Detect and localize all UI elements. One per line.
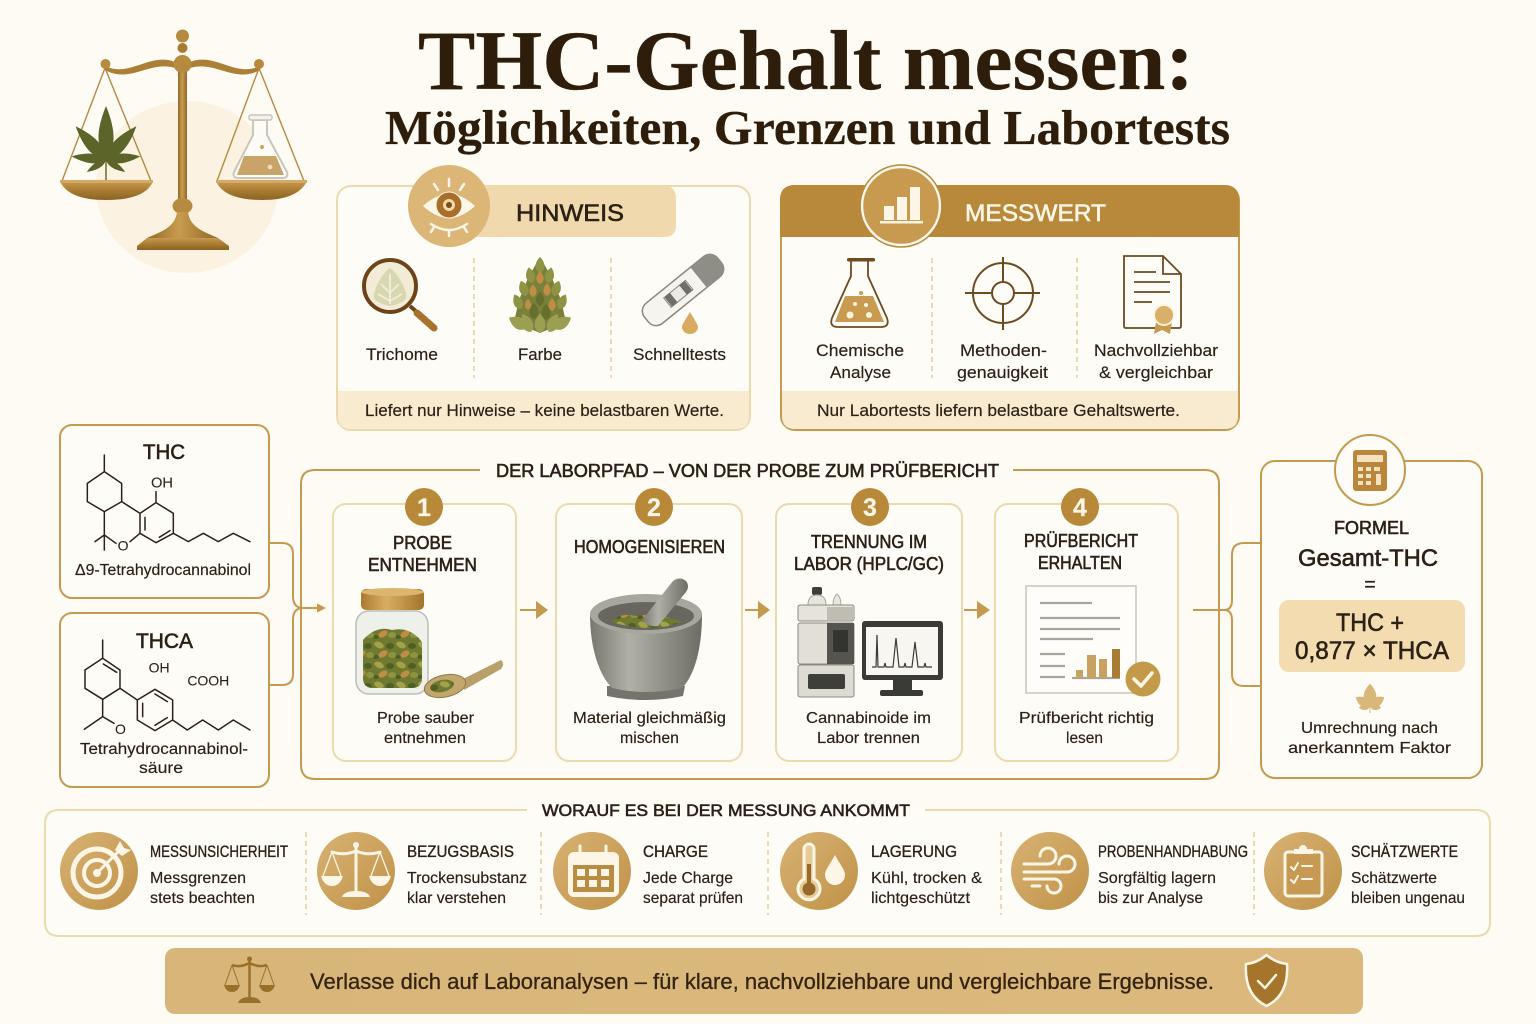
label: Methodengenauigkeit: Methoden- bbox=[960, 341, 1047, 360]
heading: Messwert: MESSWERT bbox=[965, 200, 1106, 227]
note: Messwert footer: Nur Labortests liefern belastbare Gehaltswerte. bbox=[817, 402, 1180, 420]
heading: Trennung im Labor: TRENNUNG IM bbox=[811, 532, 927, 552]
badge: 1 bbox=[405, 488, 443, 526]
heading: Probe entnehmen: ENTNEHMEN bbox=[368, 555, 477, 575]
heading: formula: FORMEL bbox=[1334, 518, 1409, 538]
factor: measurement uncertainty bbox=[60, 832, 288, 910]
text: Charge: Jede Charge bbox=[643, 870, 733, 887]
text: Lagerung: Kühl, trocken & bbox=[871, 870, 982, 887]
icon: clipboard bbox=[1264, 832, 1342, 910]
icon: target bbox=[60, 832, 138, 910]
badge: 4: 4 bbox=[1073, 494, 1087, 522]
badge: 4 bbox=[1061, 488, 1099, 526]
panel: THC molecule bbox=[60, 425, 269, 598]
icon: scales bbox=[317, 832, 395, 910]
text: Gesamt-THC equals bbox=[1298, 545, 1438, 596]
panel: Messwert bbox=[780, 165, 1239, 430]
chart: THCA structural formula: OH bbox=[149, 659, 170, 675]
text: conversion note: anerkanntem Faktor bbox=[1288, 740, 1452, 757]
label: Tetrahydrocannabinolsäure: Tetrahydrocannabinol- bbox=[80, 741, 248, 758]
text: step 3 bbox=[806, 710, 931, 747]
panel: key factors bbox=[45, 801, 1490, 936]
text: conversion note: Umrechnung nach bbox=[1301, 720, 1438, 737]
note: Hinweis footer: Liefert nur Hinweise – keine belastbaren Werte. bbox=[365, 402, 724, 420]
label: Chemische Analyse: Chemische bbox=[816, 341, 904, 360]
panel: formula bbox=[1261, 435, 1482, 778]
icon: banner scales bbox=[224, 956, 275, 1003]
callout: formula value: 0,877 × THCA bbox=[1295, 637, 1449, 665]
icon: shield with check bbox=[1246, 955, 1287, 1006]
text: Probenhandhabung bbox=[1098, 843, 1248, 907]
text: Schätzwerte: SCHÄTZWERTE bbox=[1351, 843, 1458, 861]
label: Chemische Analyse: Analyse bbox=[830, 363, 891, 382]
heading: Prüfbericht erhalten bbox=[1024, 531, 1138, 573]
text: step 1: entnehmen bbox=[384, 730, 466, 747]
icon: balance scale with leaf and flask bbox=[60, 30, 307, 273]
text: step 2 bbox=[573, 710, 726, 747]
factor: batch bbox=[553, 832, 743, 910]
icon: flask in right pan bbox=[234, 115, 287, 178]
icon: calendar bbox=[553, 832, 631, 910]
text: Lagerung: LAGERUNG bbox=[871, 843, 957, 861]
label: Nachvollziehbar und vergleichbar: & vergleichbar bbox=[1099, 363, 1213, 382]
icon: cannabis leaf in left pan bbox=[71, 106, 141, 180]
text: step 3: Labor trennen bbox=[817, 730, 920, 747]
label: Nachvollziehbar und vergleichbar bbox=[1094, 341, 1218, 382]
label: Methodengenauigkeit: genauigkeit bbox=[957, 363, 1048, 382]
chart: THC structural formula: O bbox=[118, 538, 129, 554]
text: Bezugsbasis bbox=[407, 843, 527, 907]
badge: 3: 3 bbox=[863, 494, 877, 522]
heading: key factors: WORAUF ES BEI DER MESSUNG ANKOMMT bbox=[542, 801, 910, 820]
text: Probenhandhabung: Sorgfältig lagern bbox=[1098, 870, 1216, 887]
label: Methodengenauigkeit bbox=[957, 341, 1048, 382]
title bbox=[385, 14, 1230, 155]
panel: Hinweis bbox=[337, 165, 750, 430]
heading: THC: THC bbox=[143, 441, 185, 464]
icon: calculator bbox=[1335, 435, 1405, 505]
label: Farbe: Farbe bbox=[518, 345, 562, 364]
label: Delta-9-Tetrahydrocannabinol: Δ9-Tetrahydrocannabinol bbox=[75, 562, 251, 579]
label: Nachvollziehbar und vergleichbar: Nachvollziehbar bbox=[1094, 341, 1218, 360]
text: step 1: Probe sauber bbox=[377, 710, 474, 727]
arrow: molecules into lab path bbox=[270, 543, 326, 685]
text: Lagerung: lichtgeschützt bbox=[871, 890, 971, 907]
icon: crosshair target bbox=[965, 257, 1040, 330]
chart: THC structural formula: OH bbox=[151, 476, 173, 492]
icon: small leaf bbox=[1353, 684, 1387, 713]
text: step 4: lesen bbox=[1066, 730, 1103, 747]
heading: Hinweis bbox=[450, 186, 676, 237]
icon: bar chart bbox=[860, 165, 942, 247]
step 4: test report bbox=[995, 488, 1178, 761]
label: Trichome: Trichome bbox=[366, 345, 438, 364]
text: Probenhandhabung: bis zur Analyse bbox=[1098, 890, 1203, 907]
text: step 3: Cannabinoide im bbox=[806, 710, 931, 727]
icon: HPLC instrument and monitor bbox=[798, 587, 943, 697]
title: Möglichkeiten, Grenzen und Labortests bbox=[385, 100, 1230, 155]
heading: Prüfbericht erhalten: PRÜFBERICHT bbox=[1024, 531, 1138, 551]
step 2: homogenize bbox=[556, 488, 742, 761]
chart: THC structural formula bbox=[87, 455, 250, 554]
arrow: step 2 to 3 bbox=[745, 601, 770, 619]
badge: 2: 2 bbox=[647, 494, 661, 522]
text: Probenhandhabung: PROBENHANDHABUNG bbox=[1098, 843, 1248, 861]
label: Tetrahydrocannabinolsäure bbox=[80, 741, 248, 777]
text: Messunsicherheit: MESSUNSICHERHEIT bbox=[150, 843, 288, 861]
icon: report with check bbox=[1026, 586, 1160, 696]
callout: formula value bbox=[1279, 600, 1465, 672]
text: step 1 bbox=[377, 710, 474, 747]
heading: THCA: THCA bbox=[136, 630, 193, 653]
chart: THCA structural formula: COOH bbox=[187, 673, 229, 689]
icon: mortar and pestle bbox=[590, 578, 702, 700]
chart: THCA structural formula bbox=[84, 640, 250, 737]
factor: reference basis bbox=[317, 832, 527, 910]
text: Charge: CHARGE bbox=[643, 843, 708, 861]
heading: Prüfbericht erhalten: ERHALTEN bbox=[1038, 553, 1122, 573]
heading: Trennung im Labor: LABOR (HPLC/GC) bbox=[794, 554, 944, 574]
icon: air flow bbox=[1011, 832, 1089, 910]
text: conclusion: Verlasse dich auf Laboranalysen – für klare, nachvollziehbare und vergleichbare Ergebnisse. bbox=[310, 969, 1214, 994]
heading: Hinweis: HINWEIS bbox=[516, 200, 624, 227]
arrow: step 1 to 2 bbox=[520, 601, 548, 619]
badge: 1: 1 bbox=[417, 494, 431, 522]
callout: formula value: THC + bbox=[1336, 609, 1404, 637]
icon: eye bbox=[408, 165, 490, 247]
heading: Homogenisieren: HOMOGENISIEREN bbox=[574, 537, 725, 557]
text: Bezugsbasis: Trockensubstanz bbox=[407, 870, 527, 887]
text: Lagerung bbox=[871, 843, 982, 907]
label: Chemische Analyse bbox=[816, 341, 904, 382]
factor: storage bbox=[780, 832, 982, 910]
icon: certified document bbox=[1124, 256, 1181, 334]
icon: flask bbox=[831, 258, 888, 327]
text: Schätzwerte: bleiben ungenau bbox=[1351, 890, 1465, 907]
text: step 2: mischen bbox=[620, 730, 679, 747]
text: step 2: Material gleichmäßig bbox=[573, 710, 726, 727]
factor: estimates bbox=[1264, 832, 1465, 910]
text: Schätzwerte: Schätzwerte bbox=[1351, 870, 1437, 887]
text: Bezugsbasis: BEZUGSBASIS bbox=[407, 843, 514, 861]
banner: conclusion bbox=[165, 948, 1363, 1014]
text: conversion note bbox=[1288, 720, 1452, 757]
label: Tetrahydrocannabinolsäure: säure bbox=[139, 760, 183, 777]
text: Charge: separat prüfen bbox=[643, 890, 743, 907]
title: THC-Gehalt messen: bbox=[418, 14, 1194, 108]
heading: Trennung im Labor bbox=[794, 532, 944, 574]
arrow: step 3 to 4 bbox=[964, 601, 990, 619]
text: Schätzwerte bbox=[1351, 843, 1465, 907]
text: step 4 bbox=[1019, 710, 1154, 747]
step 3: lab separation bbox=[776, 488, 962, 761]
badge: 2 bbox=[635, 488, 673, 526]
label: Schnelltests: Schnelltests bbox=[633, 345, 726, 364]
panel: lab path bbox=[301, 461, 1261, 779]
text: Bezugsbasis: klar verstehen bbox=[407, 890, 506, 907]
icon: sample jar and scoop bbox=[356, 588, 503, 701]
text: Charge bbox=[643, 843, 743, 907]
badge: 3 bbox=[851, 488, 889, 526]
text: Messunsicherheit: stets beachten bbox=[150, 890, 255, 907]
icon: thermometer and droplet bbox=[780, 832, 858, 910]
text: step 4: Prüfbericht richtig bbox=[1019, 710, 1154, 727]
heading: Probe entnehmen: PROBE bbox=[393, 533, 452, 553]
factor: sample handling bbox=[1011, 832, 1248, 910]
text: Gesamt-THC equals: = bbox=[1364, 574, 1376, 596]
icon: magnifier over trichomes bbox=[364, 260, 434, 328]
arrow: report to formula bbox=[1193, 543, 1261, 686]
panel: THCA molecule bbox=[60, 613, 269, 787]
step 1: take sample bbox=[333, 488, 516, 761]
chart: THCA structural formula: O bbox=[115, 721, 126, 737]
text: Gesamt-THC equals: Gesamt-THC bbox=[1298, 545, 1438, 572]
text: Messunsicherheit bbox=[150, 843, 288, 907]
text: Messunsicherheit: Messgrenzen bbox=[150, 870, 246, 887]
icon: rapid test strip with droplet bbox=[638, 250, 728, 334]
heading: lab path: DER LABORPFAD – VON DER PROBE ZUM PRÜFBERICHT bbox=[496, 461, 999, 481]
icon: cannabis bud bbox=[506, 257, 574, 334]
heading: Probe entnehmen bbox=[368, 533, 477, 575]
heading: Messwert bbox=[780, 185, 1239, 237]
